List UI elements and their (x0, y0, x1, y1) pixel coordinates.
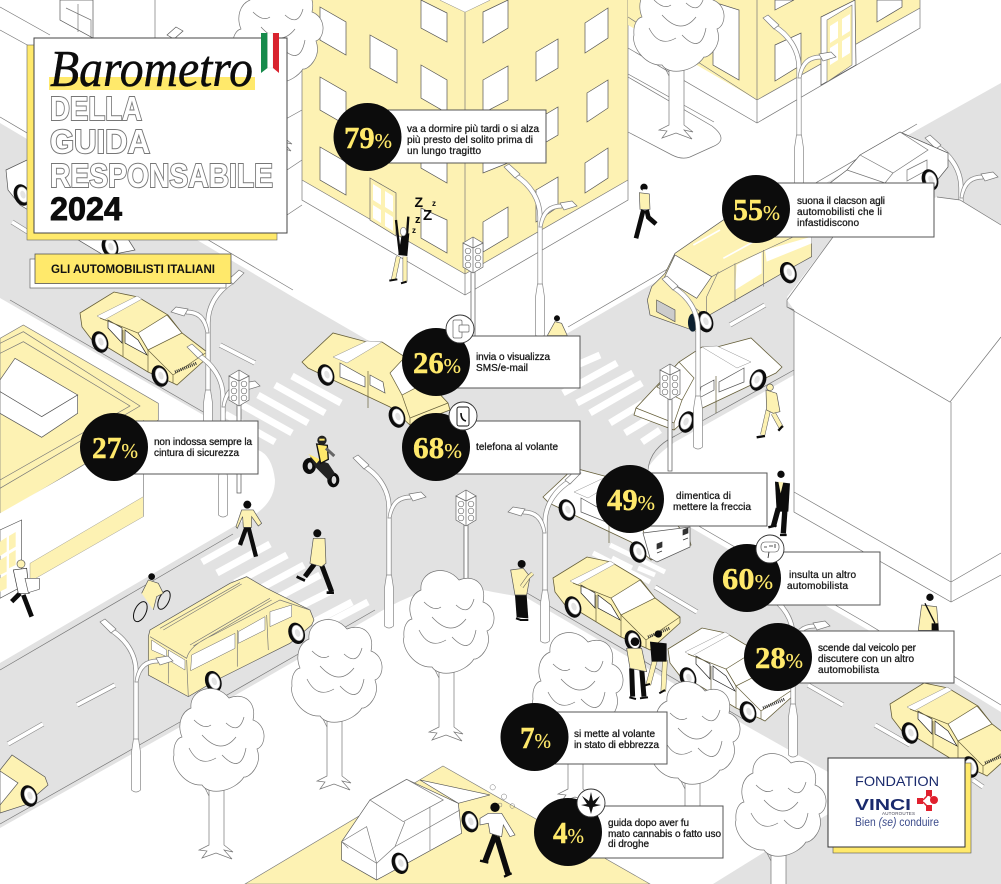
left yellow building (0, 325, 158, 598)
panel: 49% indicator: 49% (607, 482, 655, 517)
yellow wagon centre (302, 333, 450, 430)
panel: 4% drugs: mato cannabis o fatto uso (608, 829, 721, 840)
yellow van top right (647, 197, 812, 335)
logo tagline: Bien (se) conduire (855, 817, 939, 829)
panel: 79% sleep: più presto del solito prima di (407, 135, 533, 146)
central yellow building (302, 0, 628, 295)
logo card (828, 758, 971, 853)
panel: 49% indicator: dimentica di (676, 491, 731, 502)
person above 26 percent box (547, 315, 567, 336)
person: walking top (636, 184, 656, 238)
road markings (202, 355, 665, 623)
logo text Fondation: FONDATION (855, 773, 939, 789)
panel: 26% messages: SMS/e-mail (476, 363, 528, 374)
panel: 60% insults: insulta un altro (789, 570, 856, 581)
panel: 60% insults: 60% (722, 561, 773, 596)
panel: 27% seatbelt: non indossa sempre la (154, 437, 252, 448)
label: Italian drivers: GLI AUTOMOBILISTI ITALIANI (51, 264, 215, 276)
panel: 49% indicator: mettere la freccia (673, 502, 751, 513)
panel: 55% horn: suona il clacson agli (797, 196, 885, 207)
year: 2024 (50, 191, 122, 227)
panel: 4% drugs (534, 789, 723, 866)
label: Italian drivers (30, 254, 231, 288)
person: with bag on right (918, 594, 939, 630)
yellow sedan upper left (80, 292, 207, 389)
panel: 60% insults: automobilista (787, 581, 848, 592)
sleep letters Z: Z (423, 207, 432, 224)
sleep letters Z: z (412, 226, 416, 235)
panel: 7% alcohol: si mette al volante (574, 729, 655, 740)
yellow sedan centre (553, 557, 680, 654)
panel: 68% phone calls: 68% (413, 430, 462, 465)
planter island (628, 74, 721, 158)
title: Barometro: Barometro (50, 41, 253, 98)
person: suited man (768, 471, 790, 535)
sleep letters Z: z (432, 199, 436, 208)
person: delivery with parcel (12, 560, 39, 617)
panel: 7% alcohol (500, 703, 667, 771)
person: crossing 2 (297, 529, 334, 593)
panel: 27% seatbelt: cintura di sicurezza (154, 448, 239, 459)
logo text Vinci: VINCI (855, 797, 911, 814)
panel: 55% horn (722, 175, 934, 243)
panel: 7% alcohol: 7% (520, 720, 551, 755)
logo text Autoroutes: AUTOROUTES (882, 811, 915, 816)
icon: smartphone (449, 402, 477, 430)
panel: 55% horn: 55% (733, 192, 780, 227)
icon: speech bubble with insult (756, 535, 784, 563)
panel: 28% leaves vehicle: discutere con un altro (818, 654, 914, 665)
person: walking right sidewalk (757, 384, 783, 437)
person: crossing 1 (236, 501, 262, 557)
panel: 27% seatbelt: 27% (92, 430, 138, 465)
white sedan right (668, 628, 795, 725)
white wagon right centre (634, 338, 782, 435)
panel: 27% seatbelt (80, 413, 258, 481)
panel: 28% leaves vehicle (744, 623, 954, 691)
street lamps (100, 15, 836, 792)
panel: 28% leaves vehicle: automobilista (818, 665, 879, 676)
top right white car (830, 132, 948, 193)
panel: 4% drugs: guida dopo aver fu (608, 818, 689, 829)
panel: 55% horn: infastidiscono (797, 218, 859, 229)
panel: 4% drugs: di droghe (608, 839, 649, 850)
person: on phone (511, 560, 533, 620)
yellow sedan bottom left (0, 755, 48, 813)
lamp top right (925, 135, 998, 308)
person: cyclist (131, 573, 173, 624)
motorbike (303, 436, 339, 487)
subtitle outlined: RESPONSABILE (50, 157, 273, 194)
right white building (787, 197, 1001, 602)
title card (27, 33, 287, 240)
trees (174, 0, 826, 884)
subtitle outlined: DELLA (50, 90, 142, 127)
panel: 49% indicator (596, 465, 767, 533)
panel: 28% leaves vehicle: scende dal veicolo per (818, 643, 917, 654)
panel: 68% phone calls (402, 402, 580, 481)
icon: cannabis leaf (577, 789, 605, 817)
panel: 26% messages (402, 315, 580, 396)
subtitle outlined (50, 90, 273, 194)
yellow van bottom left (148, 577, 314, 697)
sleep letters Z: Z (414, 194, 424, 210)
logo mark (917, 790, 938, 811)
panel: 68% phone calls: telefona al volante (476, 442, 558, 453)
panel: 79% sleep: va a dormire più tardi o si alza (407, 124, 539, 135)
panel: 79% sleep (334, 103, 546, 171)
panel: 26% messages: 26% (413, 345, 461, 380)
left white car behind title (6, 160, 135, 260)
panel: 7% alcohol: in stato di ebbrezza (574, 740, 659, 751)
panel: 28% leaves vehicle: 28% (755, 640, 803, 675)
parking area bottom (245, 766, 650, 884)
yellow sedan bottom right (890, 683, 1001, 780)
panel: 79% sleep: 79% (344, 120, 392, 155)
panel: 60% insults (713, 535, 880, 612)
person: hood and smoke (480, 785, 515, 877)
top-left building fragments (0, 0, 302, 215)
icon: phone with message bubble (446, 315, 474, 343)
person: sleepy with yawn (389, 217, 409, 283)
lane dashes (8, 222, 983, 787)
white car with open hood (342, 779, 490, 880)
two people arguing (627, 630, 667, 699)
sleep letters Z (412, 194, 436, 235)
panel: 26% messages: invia o visualizza (476, 352, 550, 363)
panel: 4% drugs: 4% (553, 815, 584, 850)
subtitle outlined: GUIDA (50, 123, 150, 160)
curb lines (0, 117, 1001, 824)
panel: 79% sleep: un lungo tragitto (407, 146, 481, 157)
traffic lights (229, 237, 680, 580)
icon: Italian flag ribbon (261, 33, 279, 73)
white van under 49 percent (543, 468, 691, 575)
panel: 55% horn: automobilisti che li (797, 207, 882, 218)
sleep letters Z: z (415, 214, 421, 226)
upper right yellow building (628, 0, 920, 123)
